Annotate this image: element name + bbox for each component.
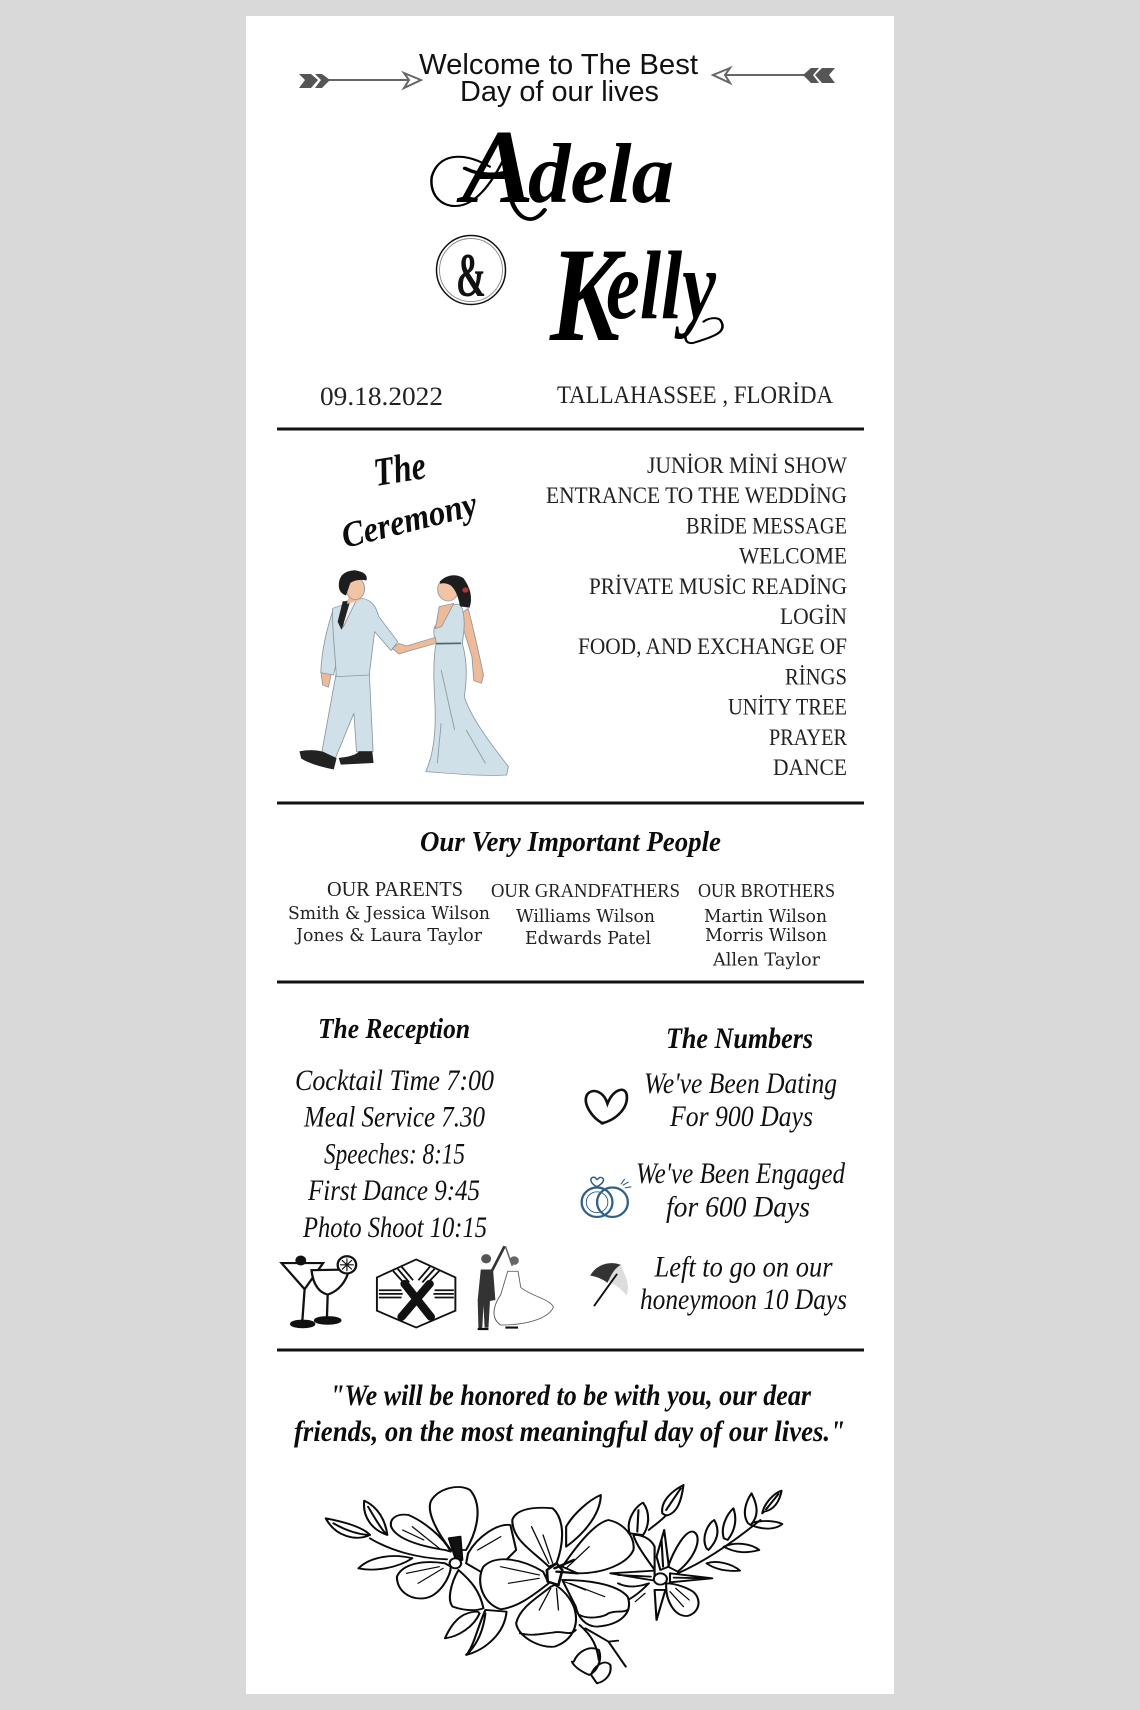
heading: welcome line: Welcome to The Best xyxy=(419,49,698,81)
column: grandfathers xyxy=(491,880,680,949)
column: brothers: Allen Taylor xyxy=(712,950,820,970)
panel: header xyxy=(299,49,835,411)
panel: the ceremony xyxy=(300,442,848,780)
panel: white card xyxy=(246,16,894,1694)
icon: rings xyxy=(582,1177,631,1217)
heading: welcome line: Day of our lives xyxy=(460,76,659,108)
panel: closing quote xyxy=(294,1379,845,1448)
stat: dating xyxy=(644,1067,837,1133)
reception schedule: Speeches: 8:15 xyxy=(324,1138,465,1170)
bottom bells xyxy=(572,1625,626,1683)
stat: dating: We've Been Dating xyxy=(644,1067,837,1100)
arrow: right xyxy=(713,68,835,83)
right flower xyxy=(610,1530,712,1620)
arrow: left xyxy=(299,73,421,88)
icon: heart xyxy=(586,1090,627,1123)
right branch and buds xyxy=(629,1485,782,1573)
name: Adela xyxy=(431,108,674,225)
programme list: BRİDE MESSAGE xyxy=(686,514,847,538)
heading: The Ceremony: The xyxy=(370,442,429,495)
reception schedule xyxy=(295,1064,494,1244)
location: TALLAHASSEE , FLORİDA xyxy=(557,382,833,409)
icon: beach umbrella xyxy=(590,1263,628,1306)
programme list: WELCOME xyxy=(739,544,847,568)
icon: cocktails xyxy=(282,1256,356,1327)
column: brothers: OUR BROTHERS xyxy=(698,880,835,902)
reception schedule: Photo Shoot 10:15 xyxy=(302,1211,487,1244)
stat: engaged xyxy=(636,1157,846,1224)
panel: the reception xyxy=(282,1013,553,1329)
illustration: floral line art xyxy=(326,1485,782,1683)
programme list: RİNGS xyxy=(785,664,847,690)
icon: dancing couple xyxy=(478,1246,553,1329)
stat: honeymoon xyxy=(640,1250,847,1316)
programme list: ENTRANCE TO THE WEDDİNG xyxy=(546,483,847,508)
reception schedule: Meal Service 7.30 xyxy=(303,1100,485,1134)
heading: The Numbers xyxy=(666,1022,813,1055)
name: Adela: A xyxy=(456,108,534,225)
programme list: FOOD, AND EXCHANGE OF xyxy=(578,634,847,659)
stat: dating: For 900 Days xyxy=(669,1100,813,1133)
programme list: PRİVATE MUSİC READİNG xyxy=(589,574,847,599)
programme list: DANCE xyxy=(773,755,847,780)
panel: our very important people xyxy=(288,826,835,970)
programme list: PRAYER xyxy=(769,725,848,750)
programme list: JUNİOR MİNİ SHOW xyxy=(647,453,847,478)
column: parents: Smith & Jessica Wilson xyxy=(288,903,490,924)
left branch and leaves xyxy=(326,1501,507,1655)
column: grandfathers: Williams Wilson xyxy=(516,906,655,927)
date: 09.18.2022 xyxy=(320,382,443,411)
icon: crossed forks xyxy=(377,1259,455,1328)
panel: closing quote: friends, on the most meaningful day of our lives." xyxy=(294,1415,845,1448)
bride xyxy=(392,576,508,775)
heading: The Ceremony xyxy=(337,442,482,556)
panel: the numbers xyxy=(582,1022,847,1316)
column: grandfathers: OUR GRANDFATHERS xyxy=(491,880,680,902)
stat: engaged: We've Been Engaged xyxy=(636,1157,846,1190)
name: Kelly: K xyxy=(549,221,626,370)
center flower xyxy=(480,1495,634,1647)
icon: ampersand seal xyxy=(436,236,506,310)
programme list xyxy=(546,453,848,780)
stat: engaged: for 600 Days xyxy=(666,1190,810,1224)
reception schedule: First Dance 9:45 xyxy=(307,1174,480,1207)
heading: welcome line xyxy=(419,49,698,108)
reception schedule: Cocktail Time 7:00 xyxy=(295,1064,494,1097)
heading: The Reception xyxy=(318,1013,470,1045)
illustration: couple holding hands xyxy=(300,571,508,775)
column: brothers xyxy=(698,880,835,970)
icon: ampersand seal: & xyxy=(456,242,486,310)
programme list: LOGİN xyxy=(780,604,847,629)
name: Adela: dela xyxy=(528,127,674,221)
column: parents: Jones & Laura Taylor xyxy=(294,925,482,946)
name: Kelly xyxy=(549,221,723,370)
column: brothers: Morris Wilson xyxy=(705,925,827,946)
left flower xyxy=(391,1487,516,1610)
column: parents xyxy=(288,877,490,946)
column: brothers: Martin Wilson xyxy=(704,906,827,927)
stat: honeymoon: Left to go on our xyxy=(654,1250,833,1284)
column: grandfathers: Edwards Patel xyxy=(525,928,651,949)
panel: closing quote: "We will be honored to be with you, our dear xyxy=(330,1379,811,1412)
groom xyxy=(300,571,398,769)
heading: Our Very Important People xyxy=(420,826,721,858)
column: parents: OUR PARENTS xyxy=(327,877,463,901)
name: Kelly: elly xyxy=(606,232,717,339)
programme list: UNİTY TREE xyxy=(728,694,847,720)
heading: The Ceremony: Ceremony xyxy=(337,483,482,556)
stat: honeymoon: honeymoon 10 Days xyxy=(640,1283,847,1316)
